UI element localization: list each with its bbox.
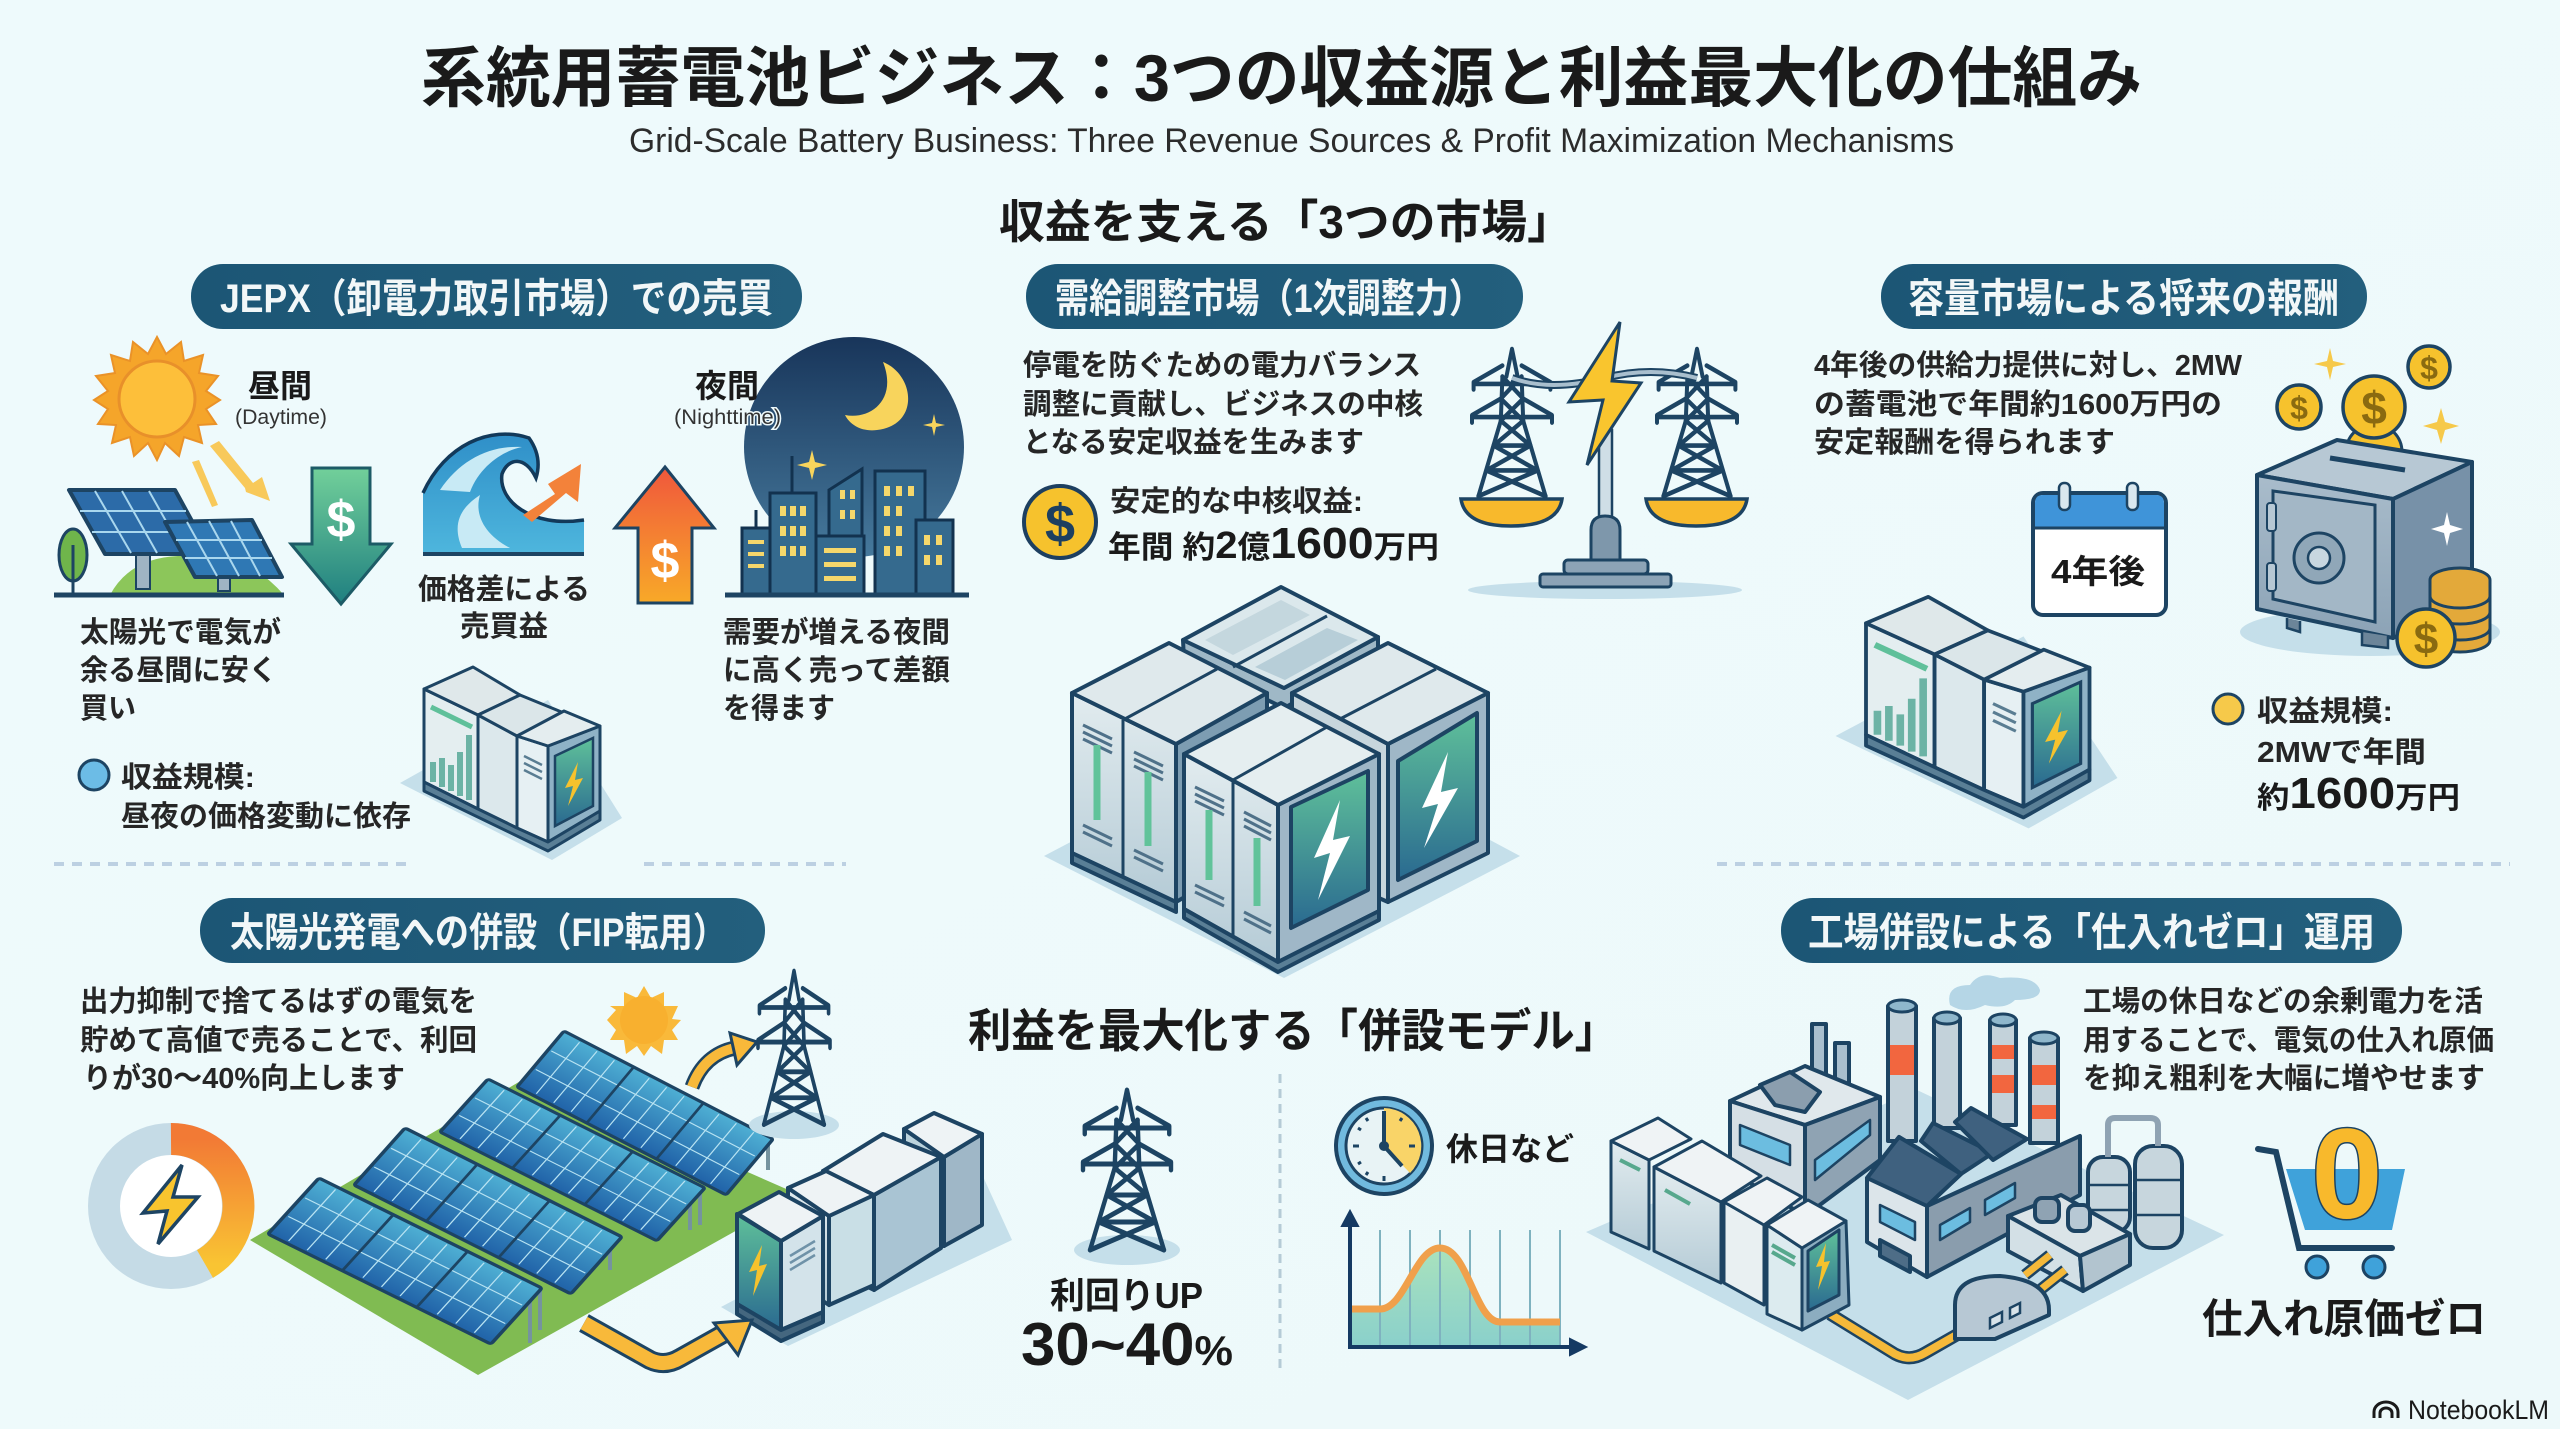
legend: revenue scale: 昼夜の価格変動に依存	[121, 800, 411, 833]
heading: three markets: 収益を支える「3つの市場」	[999, 196, 1573, 248]
pill heading: JEPX: JEPX（卸電力取引市場）での売買	[220, 277, 773, 321]
legend: capacity revenue: 2MWで年間	[2257, 736, 2426, 769]
label: price spread profit: 価格差による	[418, 573, 590, 606]
icon: transmission tower	[1074, 1090, 1180, 1265]
heading: profit model: 利益を最大化する「併設モデル」	[968, 1005, 1618, 1057]
label: holidays: 休日など	[1446, 1131, 1574, 1167]
icon: shopping cart with zero	[2258, 1103, 2405, 1278]
arrow: sunlight	[192, 441, 270, 507]
icon: wave	[423, 434, 584, 554]
text: buy in daytime	[80, 615, 281, 725]
subtitle: Grid-Scale Battery Business: Three Revenue Sources & Profit Maximization Mechanisms	[629, 122, 1954, 160]
text: sell at night	[723, 615, 950, 725]
icon: night city	[725, 337, 969, 595]
legend: revenue scale	[79, 760, 411, 833]
text: solar description	[80, 985, 477, 1095]
pill heading: solar: 太陽光発電への併設（FIP転用）	[230, 911, 727, 955]
icon: sun	[94, 337, 220, 460]
callout: core revenue: 安定的な中核収益:	[1110, 485, 1363, 518]
panel: JEPX trading	[54, 264, 969, 860]
divider: dashed vertical	[1278, 1074, 1282, 1368]
text: factory description: 工場の休日などの余剰電力を活	[2083, 985, 2483, 1018]
panel: capacity market	[1814, 264, 2500, 828]
label: daytime: 昼間	[248, 368, 312, 404]
text: capacity description: 4年後の供給力提供に対し、2MW	[1814, 349, 2243, 382]
arrow: to grid	[692, 1033, 757, 1087]
label: nighttime: (Nighttime)	[674, 406, 781, 429]
pill heading: capacity: 容量市場による将来の報酬	[1908, 277, 2339, 321]
panel: factory co-location	[1586, 898, 2494, 1400]
stat: yield up: 利回りUP	[1050, 1275, 1203, 1316]
icon: safe with coins: $	[2361, 382, 2387, 434]
icon: calendar	[2033, 483, 2166, 615]
text: solar description: 出力抑制で捨てるはずの電気を	[80, 985, 477, 1018]
callout: core revenue	[1108, 485, 1439, 568]
text: sell at night: 需要が増える夜間	[723, 615, 950, 649]
text: factory description: を抑え粗利を大幅に増やせます	[2083, 1062, 2485, 1095]
pill heading: balancing	[1026, 264, 1523, 329]
text: capacity description: 安定報酬を得られます	[1814, 426, 2115, 459]
icon: transmission tower	[749, 971, 839, 1139]
icon: coin: $	[1045, 494, 1075, 554]
pill heading: capacity	[1881, 264, 2367, 329]
legend: revenue scale: 収益規模:	[121, 761, 255, 794]
stat: yield up	[1021, 1275, 1233, 1378]
pill heading: factory	[1781, 898, 2402, 963]
arrow: buy low	[291, 468, 391, 604]
panel: solar co-location	[80, 898, 1012, 1375]
text: sell at night: を得ます	[723, 692, 835, 725]
label: zero cost: 仕入れ原価ゼロ	[2202, 1296, 2486, 1342]
label: daytime	[235, 368, 327, 429]
text: balancing description: となる安定収益を生みます	[1023, 426, 1364, 459]
pill heading: balancing: 需給調整市場（1次調整力）	[1055, 277, 1483, 321]
label: nighttime: 夜間	[695, 368, 759, 404]
text: balancing description: 調整に貢献し、ビジネスの中核	[1023, 388, 1423, 421]
icon: clock	[1336, 1098, 1432, 1194]
legend: capacity revenue: 収益規模:	[2257, 695, 2393, 728]
icon: solar array	[250, 1031, 800, 1375]
text: sell at night: に高く売って差額	[723, 654, 950, 687]
icon: safe with coins: $	[2290, 390, 2308, 426]
icon: balance scale with towers	[1461, 322, 1747, 599]
icon: safe with coins: $	[2414, 615, 2438, 664]
text: capacity description: の蓄電池で年間約1600万円の	[1814, 388, 2222, 421]
text: factory description: 用することで、電気の仕入れ原価	[2083, 1024, 2494, 1057]
text: buy in daytime: 余る昼間に安く	[80, 654, 277, 687]
text: solar description: りが30〜40%向上します	[83, 1061, 405, 1095]
chart: surplus curve	[1342, 1211, 1586, 1355]
pill heading: factory: 工場併設による「仕入れゼロ」運用	[1808, 911, 2375, 955]
watermark: NotebookLM: NotebookLM	[2408, 1395, 2549, 1425]
icon: battery unit	[400, 667, 622, 860]
label: daytime: (Daytime)	[235, 406, 327, 429]
text: balancing description	[1023, 349, 1423, 459]
icon: battery unit	[1836, 597, 2117, 828]
dashed separators	[54, 862, 2510, 866]
label: price spread profit: 売買益	[460, 610, 548, 643]
text: buy in daytime: 買い	[80, 693, 136, 725]
label: nighttime	[674, 368, 781, 429]
text: buy in daytime: 太陽光で電気が	[80, 615, 281, 649]
arrow: buy low: $	[327, 491, 356, 549]
stat: yield up: 30~40%	[1021, 1311, 1233, 1378]
text: capacity description	[1814, 349, 2243, 459]
pill heading: JEPX	[191, 264, 802, 329]
chart: donut	[104, 1139, 238, 1273]
callout: core revenue: 年間 約2億1600万円	[1108, 519, 1439, 568]
icon: coin	[1024, 486, 1096, 558]
icon: solar panels	[54, 490, 284, 595]
arrow: to battery	[584, 1320, 752, 1363]
panel: profit model centre	[968, 1005, 1618, 1378]
text: factory description	[2083, 985, 2494, 1095]
arrow: sell high	[615, 467, 714, 603]
text: solar description: 貯めて高値で売ることで、利回	[80, 1024, 477, 1057]
text: balancing description: 停電を防ぐための電力バランス	[1023, 349, 1421, 382]
pill heading: solar	[200, 898, 765, 963]
icon: safe with coins	[2240, 346, 2500, 667]
title: 系統用蓄電池ビジネス：3つの収益源と利益最大化の仕組み	[421, 41, 2142, 115]
icon: factory with batteries	[1586, 975, 2224, 1400]
icon: large battery bank	[1044, 587, 1520, 978]
legend: capacity revenue	[2213, 694, 2460, 818]
icon: calendar: 4年後	[2051, 553, 2145, 590]
label: price spread profit	[418, 573, 590, 643]
icon: battery row	[721, 1113, 1012, 1346]
arrow: sell high: $	[651, 532, 680, 590]
legend: capacity revenue: 約1600 万円	[2257, 769, 2460, 818]
icon: safe with coins: $	[2420, 350, 2438, 386]
panel: balancing market	[1023, 264, 1747, 978]
icon: shopping cart with zero: 0	[2311, 1103, 2383, 1246]
icon: small sun	[607, 986, 681, 1056]
